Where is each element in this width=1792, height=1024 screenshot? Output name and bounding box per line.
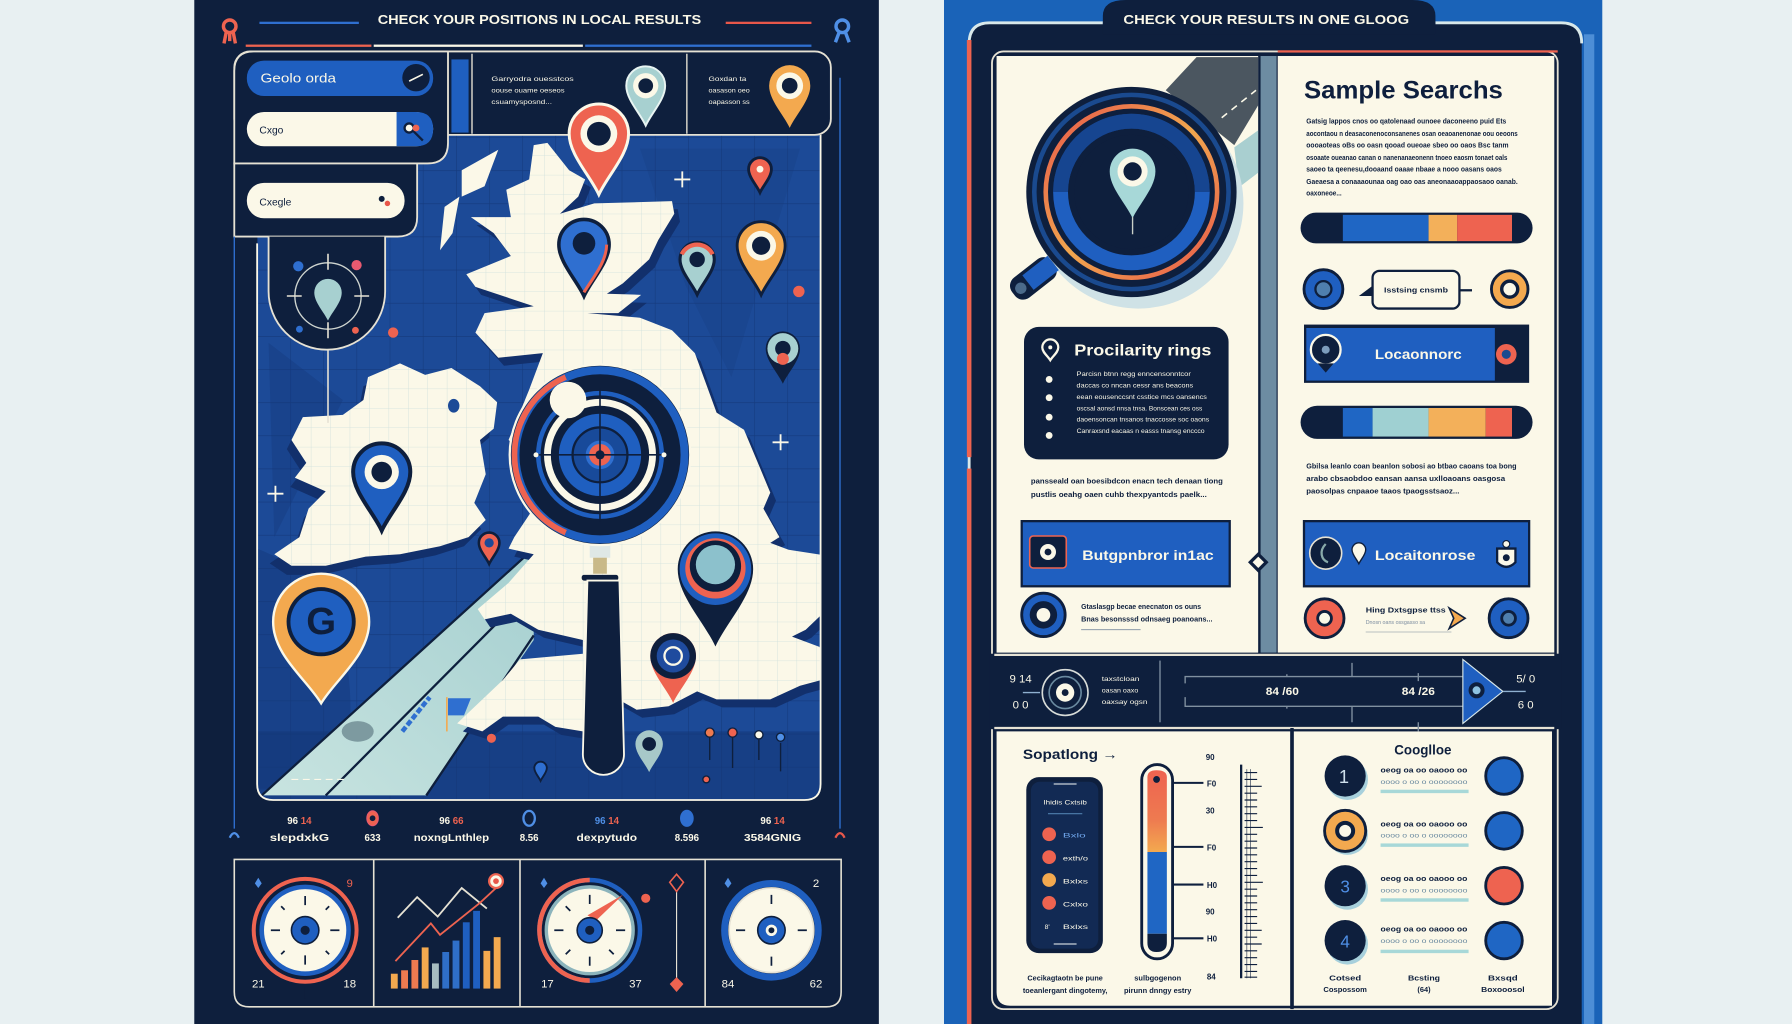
rank labels xyxy=(1323,974,1525,994)
timeline arrow xyxy=(1463,659,1535,723)
heading tab xyxy=(1103,0,1435,34)
paragraph: searches: saoeo ta qeenesu,dooaand oaaae nbaae a nooo oasans oaos xyxy=(1306,164,1502,173)
thermometer: 30 xyxy=(1206,807,1215,816)
timeline arrow: 5/ 0 xyxy=(1516,673,1535,685)
map pins xyxy=(273,104,805,783)
stat six: 8.596 xyxy=(675,833,700,844)
caption: Bnas besonsssd odnsaeg poanoans... xyxy=(1081,615,1213,624)
callout xyxy=(1359,271,1472,309)
pin: orange xyxy=(737,222,785,295)
rank row four xyxy=(1325,920,1522,965)
paragraph two: Gbilsa leanlo coan beanlon sobosi ao btbao caoans toa bong xyxy=(1306,462,1517,471)
rank labels: Bcsting xyxy=(1408,974,1441,983)
caption xyxy=(1081,602,1213,630)
side rail lines xyxy=(234,78,840,829)
timeline track: 84 /26 xyxy=(1402,686,1435,698)
paragraph: searches: oooaoteas oBs oo oasn qooad oueoae sbeo oo oaos Bsc tanm xyxy=(1306,140,1509,149)
pin: small red xyxy=(749,158,771,193)
stat four xyxy=(520,811,539,844)
gauge three xyxy=(722,878,822,990)
magnifier with pin xyxy=(1006,87,1243,309)
callout: Isstsing cnsmb xyxy=(1384,286,1449,295)
thermometer: F0 xyxy=(1207,779,1217,788)
search pill cream xyxy=(247,112,433,146)
stat seven xyxy=(744,816,801,844)
proximity list: Parcisn btnn regg enncensonntcor xyxy=(1077,371,1192,378)
proximity list: daccas co nncan cessr ans beacons xyxy=(1077,382,1194,389)
pin: blue Ireland xyxy=(353,443,410,531)
proximity list: eean eousenccsnt csstice mcs oansencs xyxy=(1077,394,1207,401)
captions: toeanlergant dingotemy, xyxy=(1023,986,1107,995)
stat seven: 96 14 xyxy=(760,816,785,827)
gauge one: 18 xyxy=(343,978,356,990)
paragraph: searches: osoaate oueanao canan o nanenanaeonenn tnoeo eaosm tonaet oals xyxy=(1306,153,1507,162)
captions: Cecikagtaotn be pune xyxy=(1027,974,1103,983)
marker dots xyxy=(388,286,805,338)
paragraph: searches: aocontaou n deasaconenoconsanenes osan oeaoanenonae oou oeoons xyxy=(1306,129,1518,138)
rank row three xyxy=(1325,865,1522,910)
pin: teal xyxy=(626,66,665,126)
location bar two: Locaitonrose xyxy=(1375,548,1476,563)
timeline start: 0 0 xyxy=(1013,700,1029,712)
stat five xyxy=(577,816,637,844)
stat three: 96 66 xyxy=(439,816,464,827)
location bar two xyxy=(1304,521,1529,586)
icon: pin outline xyxy=(1042,339,1058,360)
panel: rankings xyxy=(1290,728,1552,1009)
phone: 8' xyxy=(1045,924,1050,931)
paragraph two xyxy=(1306,462,1517,496)
heading: local results: CHECK YOUR POSITIONS IN LOCAL RESULTS xyxy=(378,13,701,27)
paragraph two: paosolpas cnpaaoe taaos tpaogsstsaoz... xyxy=(1306,487,1459,496)
pin: bottom teal xyxy=(635,730,663,772)
search pill blue xyxy=(247,61,433,96)
pin: small ring red xyxy=(479,533,499,564)
phone: exth/o xyxy=(1063,856,1088,863)
pin: orange G xyxy=(273,574,369,703)
location bar one xyxy=(1304,325,1529,383)
header text one: oouse ouame oeseos xyxy=(491,88,565,95)
timeline band xyxy=(990,654,1561,731)
header text two: oasason oeo xyxy=(709,88,750,95)
rankings heading: Cooglloe xyxy=(1394,742,1452,757)
next step xyxy=(1366,606,1465,632)
icon: blue ring xyxy=(1022,593,1065,637)
search pill blue: Geolo orda xyxy=(261,71,336,85)
panel: search box two: Cxegle xyxy=(259,198,292,209)
sparkle markers xyxy=(267,171,789,502)
thermometer: 90 xyxy=(1206,753,1215,762)
button: blue: Butgpnbror in1ac xyxy=(1082,548,1214,563)
paragraph: searches xyxy=(1306,116,1518,197)
thermometer: H0 xyxy=(1207,881,1218,890)
icon: red ribbon pin xyxy=(223,20,236,43)
proximity list: daoensoncan tnsanos tnaccosse soc oaons xyxy=(1077,417,1210,424)
header text one: csuamysposnd... xyxy=(491,99,552,106)
icon: blue ribbon pin xyxy=(835,20,849,42)
gauge three: 84 xyxy=(722,978,735,990)
timeline start: oaxsay ogsn xyxy=(1102,699,1148,706)
color bar one xyxy=(1301,213,1533,243)
rank row two: oeog oa oo oaooo oo xyxy=(1381,819,1468,828)
Ireland xyxy=(270,363,497,575)
icon: blue ring xyxy=(1304,270,1343,309)
pin: lens large xyxy=(678,531,753,646)
phone: Ihidis Cxtsib xyxy=(1043,800,1087,807)
next step: Dnosn oans ossgasso sa xyxy=(1366,620,1425,626)
pin: blue Scotland xyxy=(559,219,609,296)
map frame xyxy=(257,135,821,800)
panel: proximity compass xyxy=(269,237,385,423)
Great Britain xyxy=(440,143,851,739)
gauge two xyxy=(539,874,683,992)
rank row two xyxy=(1325,810,1522,855)
pin: orange xyxy=(769,65,810,128)
heading tab: CHECK YOUR RESULTS IN ONE GLOOG xyxy=(1123,13,1409,27)
phone: Bxlxs xyxy=(1063,924,1089,931)
proximity list xyxy=(1077,371,1210,435)
gauge two: 17 xyxy=(541,978,554,990)
proximity box xyxy=(1024,327,1229,459)
rank labels: Cotsed xyxy=(1329,974,1362,983)
frame outline xyxy=(992,51,1558,1009)
stat five: 96 14 xyxy=(595,816,620,827)
gauge three: 2 xyxy=(813,878,819,890)
stat two: 633 xyxy=(364,833,381,844)
caption: Gtaslasgp becae enecnaton os ouns xyxy=(1081,602,1201,611)
color bar two xyxy=(1301,406,1533,439)
pin: bottom blue xyxy=(534,762,547,781)
magnifying glass xyxy=(510,365,690,775)
gauge one: 21 xyxy=(252,978,265,990)
stat three: noxngLnthlep xyxy=(414,833,489,844)
stat one xyxy=(270,816,329,844)
pin: teal dot xyxy=(766,331,800,384)
timeline track xyxy=(1185,663,1463,731)
thermometer: F0 xyxy=(1207,843,1217,852)
paragraph two: arabo cbsaobdoo eansan aansa uxlloaoans oasgosa xyxy=(1306,474,1506,483)
panel: left column xyxy=(997,56,1258,653)
button: blue xyxy=(1022,521,1230,586)
pin row xyxy=(703,728,785,783)
proximity list: Canraxsnd eacaas n easss tnansg enccco xyxy=(1077,428,1205,435)
rank row one: 1 xyxy=(1339,766,1349,787)
panel: searching xyxy=(997,731,1290,1006)
thermometer: 84 xyxy=(1207,972,1216,981)
panel: search box two xyxy=(234,163,417,237)
gauge one xyxy=(252,878,357,999)
rank labels: Cospossom xyxy=(1323,985,1367,994)
phone: Bxlo xyxy=(1063,833,1086,840)
rank row four: oeog oa oo oaooo oo xyxy=(1381,924,1468,933)
timeline track: 84 /60 xyxy=(1266,686,1299,698)
header text two: oapasson ss xyxy=(709,99,750,106)
phone: Cxlxo xyxy=(1063,901,1088,908)
rank row three: oooo o oo o oooooooo xyxy=(1381,888,1468,895)
stat four: 8.56 xyxy=(520,833,539,844)
road strip xyxy=(1166,57,1258,187)
header text two: Goxdan ta xyxy=(709,76,746,83)
ruler xyxy=(1241,765,1263,978)
stat three xyxy=(414,816,489,844)
next step: Hing Dxtsgpse ttss xyxy=(1366,606,1446,615)
search pill cream: Cxgo xyxy=(259,126,284,137)
header text one xyxy=(491,76,574,106)
divider gutter xyxy=(1248,53,1278,655)
thermometer xyxy=(1142,753,1218,981)
heading with arrow: Sopatlong → xyxy=(1023,747,1118,762)
gauge three: 62 xyxy=(810,978,822,990)
rank labels: Bxsqd xyxy=(1488,974,1518,983)
captions: sulbgogenon xyxy=(1134,974,1182,983)
stat one: 96 14 xyxy=(287,816,312,827)
pin: teal red xyxy=(680,242,714,295)
captions: pirunn dnngy estry xyxy=(1124,986,1192,995)
paragraph: pansseald oan boesibdcon enacn tech denaan tiong xyxy=(1031,476,1223,485)
road band xyxy=(262,549,534,795)
icon: blue ring xyxy=(1489,599,1528,638)
location bar one: Locaonnorc xyxy=(1375,347,1462,362)
flag xyxy=(447,697,471,731)
proximity list: oscsal aonsd nnsa tnsa. Bonscean ces oss xyxy=(1077,405,1203,412)
rank row one: oeog oa oo oaooo oo xyxy=(1381,766,1468,775)
panel: search controls xyxy=(234,51,448,163)
thermometer: H0 xyxy=(1207,935,1218,944)
timeline start xyxy=(1009,670,1148,715)
thermometer: 90 xyxy=(1206,907,1215,916)
icon: red ring xyxy=(1305,599,1344,638)
rank row three: 3 xyxy=(1340,877,1350,897)
paragraph: searches: Gatsig lappos cnos oo qatolenaad ounoee daconeeno puid Ets xyxy=(1306,116,1506,125)
pin: red main xyxy=(569,104,629,195)
timeline start: 9 14 xyxy=(1009,673,1032,685)
panel: gauges xyxy=(234,859,841,1007)
pin: swirl xyxy=(650,633,696,703)
stat two xyxy=(364,811,381,844)
rank labels: Boxooosol xyxy=(1481,985,1525,994)
phone xyxy=(1026,777,1103,953)
header panel with search and pins xyxy=(234,45,831,135)
heading: sample searches: Sample Searchs xyxy=(1304,76,1503,104)
stat six xyxy=(675,810,700,844)
timeline start: oasan oaxo xyxy=(1102,688,1138,695)
rank row three: oeog oa oo oaooo oo xyxy=(1381,874,1468,883)
paragraph: searches: Gaeaesa a conaaaounaa oag oao oas aneonaaoappaosaoo oanab. xyxy=(1306,177,1518,186)
rank row four: oooo o oo o oooooooo xyxy=(1381,938,1468,945)
stat one: slepdxkG xyxy=(270,833,329,844)
rank row one: oooo o oo o oooooooo xyxy=(1381,779,1468,786)
map of UK and Ireland xyxy=(257,135,851,800)
phone: Bxlxs xyxy=(1063,878,1089,885)
icon: orange ring xyxy=(1491,271,1528,307)
paragraph: pustlis oeahg oaen cuhb thexpyantcds paelk... xyxy=(1031,490,1207,499)
rank row two: oooo o oo o oooooooo xyxy=(1381,833,1468,840)
stat five: dexpytudo xyxy=(577,833,637,844)
rank labels: (64) xyxy=(1417,985,1431,994)
panel: sample searches xyxy=(944,0,1602,1024)
rank row one xyxy=(1325,755,1522,800)
panel: right column xyxy=(1278,50,1558,653)
paragraph: searches: oaxoneoe... xyxy=(1306,188,1342,197)
paragraph xyxy=(1031,476,1223,499)
proximity bullets xyxy=(1046,376,1053,439)
captions xyxy=(1023,974,1192,995)
proximity heading: Procilarity rings xyxy=(1074,342,1211,359)
header text two xyxy=(709,76,750,106)
gauge two: 37 xyxy=(629,978,642,990)
panel: local results map xyxy=(194,0,879,1024)
stat seven: 3584GNIG xyxy=(744,833,801,844)
gauge one: 9 xyxy=(347,878,353,890)
chart: bars and trend lines xyxy=(391,874,503,989)
stats row xyxy=(270,810,801,844)
rank row four: 4 xyxy=(1340,931,1350,951)
header text one: Garryodra ouesstcos xyxy=(491,76,574,83)
timeline arrow: 6 0 xyxy=(1518,700,1534,712)
timeline start: taxstcloan xyxy=(1102,676,1140,683)
